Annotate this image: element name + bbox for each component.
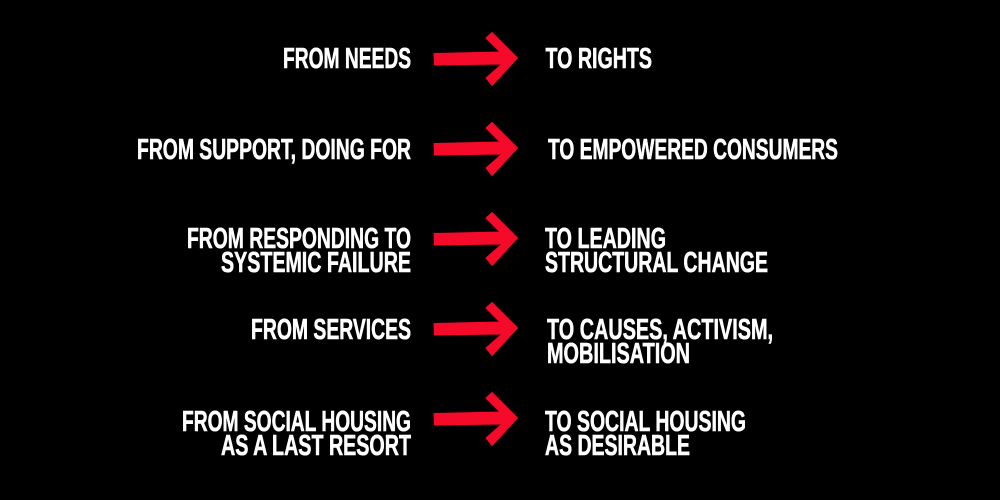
to label: causes, activism, mobilisation: MOBILISATION [547,338,690,370]
from label: social housing as a last resort: FROM SOCIAL HOUSING [182,406,411,438]
from label: responding to systemic failure: FROM RESPONDING TO [187,223,411,255]
from label: responding to systemic failure [187,223,411,279]
arrow 4 [434,302,518,356]
row 3: systemic failure to structural change [187,212,768,279]
from label: support: FROM SUPPORT, DOING FOR [137,134,411,166]
arrow 2 [434,122,518,176]
to label: leading structural change: STRUCTURAL CHANGE [545,247,768,279]
to label: social housing as desirable: TO SOCIAL HOUSING [545,406,746,438]
to label: social housing as desirable: AS DESIRABLE [545,430,690,462]
row 5: last resort to desirable [182,392,746,462]
from label: responding to systemic failure: SYSTEMIC FAILURE [221,247,411,279]
from label: services: FROM SERVICES [251,314,411,346]
row 1: needs to rights [283,32,652,86]
to label: rights: TO RIGHTS [546,43,652,75]
to label: leading structural change: TO LEADING [545,223,666,255]
to label: social housing as desirable [545,406,746,462]
to label: empowered consumers: TO EMPOWERED CONSUMERS [548,134,838,166]
arrow 5 [434,392,518,446]
from label: social housing as a last resort: AS A LAST RESORT [221,430,411,462]
arrow 3 [434,212,518,266]
row 4: services to causes [251,302,773,370]
to label: leading structural change [545,223,768,279]
to label: causes, activism, mobilisation [547,314,773,370]
from label: social housing as a last resort [182,406,411,462]
arrow 1 [434,32,518,86]
row 2: support to empowered consumers [137,122,838,176]
to label: causes, activism, mobilisation: TO CAUSES, ACTIVISM, [547,314,773,346]
from label: needs: FROM NEEDS [283,43,411,75]
